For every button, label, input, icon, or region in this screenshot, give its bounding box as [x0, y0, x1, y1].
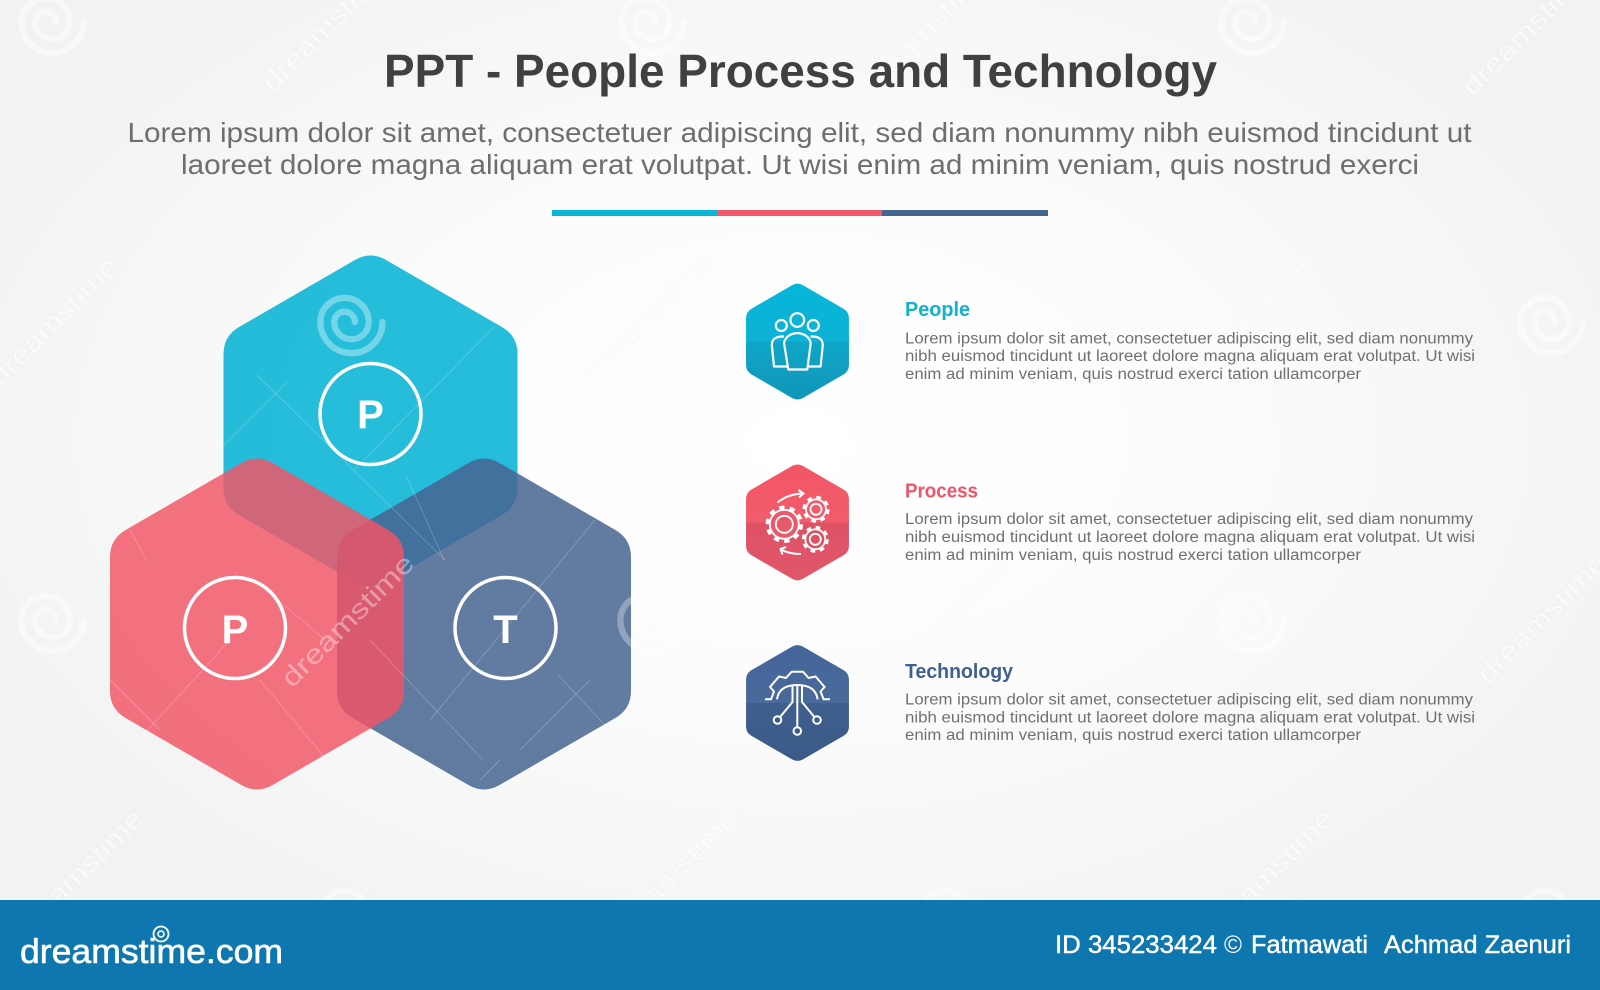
heading: people: People	[905, 299, 970, 321]
description: process: Lorem ipsum dolor sit amet, consectetuer adipiscing elit, sed diam nonummy	[905, 511, 1473, 528]
hexagon: technology: T	[493, 608, 518, 652]
background watermark pattern: dreamstime	[576, 246, 717, 387]
background watermark pattern: dreamstime	[603, 803, 744, 944]
description: process	[905, 511, 1475, 564]
icon: gears with arrows	[746, 464, 849, 580]
description: people: enim ad minim veniam, quis nostrud exerci tation ullamcorper	[905, 366, 1361, 383]
description: technology: Lorem ipsum dolor sit amet, consectetuer adipiscing elit, sed diam nonummy	[905, 692, 1473, 708]
item: people	[746, 284, 1475, 400]
hexagon: process	[110, 458, 404, 790]
footer banner	[0, 900, 1600, 990]
divider bar	[552, 210, 1048, 216]
credit text: Fatmawati	[1251, 931, 1368, 959]
background watermark pattern: dreamstime	[876, 548, 1017, 689]
subtitle text: laoreet dolore magna aliquam erat volutpat. Ut wisi enim ad minim veniam, quis nostrud exerci	[181, 149, 1419, 180]
watermark over hexagons: dreamstime	[275, 548, 420, 693]
description: process: enim ad minim veniam, quis nostrud exerci tation ullamcorper	[905, 547, 1361, 564]
description: people: nibh euismod tincidunt ut laoreet dolore magna aliquam erat volutpat. Ut wisi	[905, 348, 1475, 365]
credit text: Achmad Zaenuri	[1384, 931, 1571, 959]
description: people: Lorem ipsum dolor sit amet, consectetuer adipiscing elit, sed diam nonummy	[905, 330, 1473, 348]
hexagon: people: P	[357, 393, 384, 437]
description: technology: nibh euismod tincidunt ut laoreet dolore magna aliquam erat volutpat. Ut wisi	[905, 709, 1475, 726]
hexagon venn diagram	[110, 256, 682, 790]
hexagon: process: P	[222, 608, 248, 652]
credit text: ©	[1224, 931, 1243, 959]
background watermark pattern: dreamstime	[1198, 803, 1339, 944]
item: process	[746, 464, 1475, 580]
description: technology	[905, 692, 1475, 744]
hexagon: technology	[337, 458, 631, 790]
icon: people group	[746, 284, 849, 400]
watermark over hexagons	[110, 326, 682, 780]
description: people	[905, 330, 1475, 383]
credit text	[1055, 931, 1571, 959]
description: technology: enim ad minim veniam, quis nostrud exerci tation ullamcorper	[905, 727, 1361, 744]
item: technology	[746, 645, 1475, 761]
background watermark pattern: dreamstime	[1471, 548, 1600, 689]
title: PPT - People Process and Technology	[384, 45, 1217, 97]
subtitle text: Lorem ipsum dolor sit amet, consectetuer adipiscing elit, sed diam nonummy nibh euismod tincidunt ut	[128, 117, 1472, 148]
background watermark pattern: dreamstime	[8, 803, 149, 944]
subtitle text	[128, 117, 1472, 180]
description: process: nibh euismod tincidunt ut laoreet dolore magna aliquam erat volutpat. Ut wisi	[905, 529, 1475, 546]
heading: technology: Technology	[905, 661, 1014, 683]
credit text: ID 345233424	[1055, 931, 1217, 959]
hexagon: people	[224, 256, 518, 586]
heading: process: Process	[905, 480, 978, 502]
logo: dreamstime.com: dreamstime.com	[20, 933, 283, 971]
background watermark pattern: dreamstime	[1176, 248, 1317, 389]
icon: gear with circuit	[746, 645, 849, 761]
